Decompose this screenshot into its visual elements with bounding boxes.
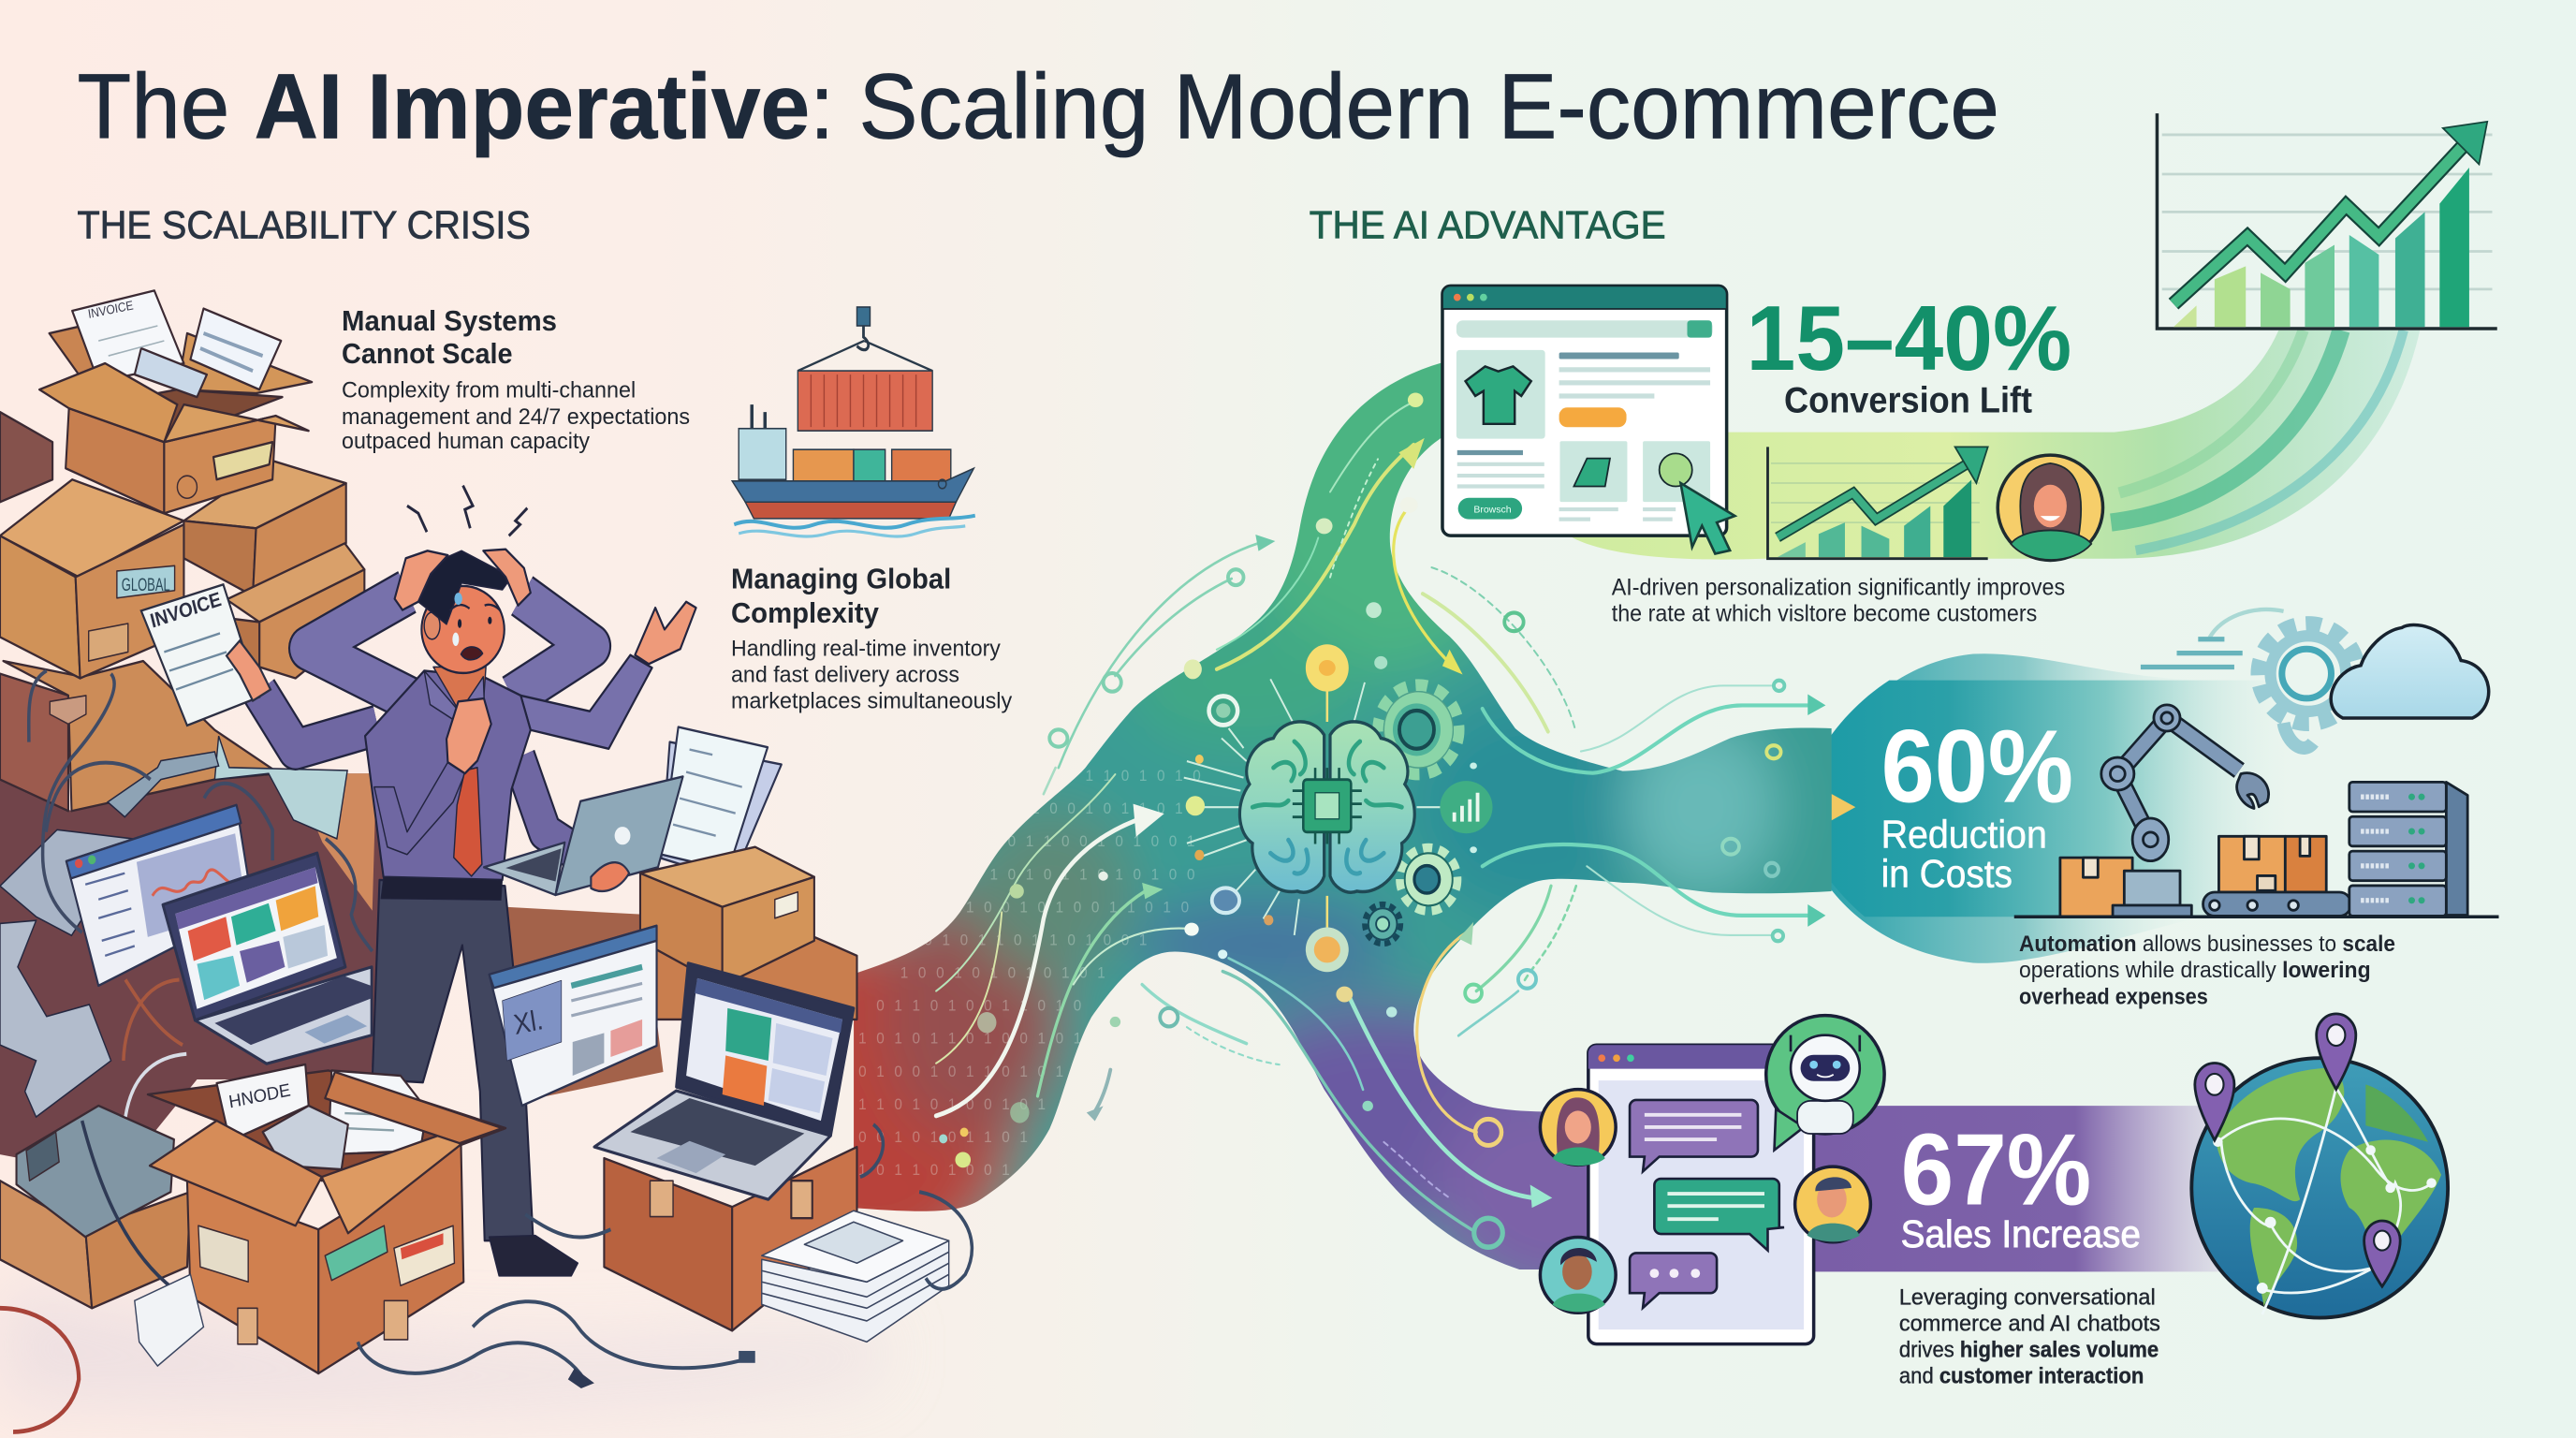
- text: automation description: Automation allows businesses to scale: [2019, 932, 2395, 957]
- stat: cost reduction: 60%: [1881, 709, 2073, 824]
- text: automation description: operations while drastically lowering: [2019, 959, 2371, 983]
- monitor: analytics dashboard: [66, 805, 253, 986]
- right box stack: [640, 847, 856, 1020]
- papers and handheld laptop: [484, 727, 782, 895]
- text block: managing global complexity: [731, 562, 1012, 713]
- text: conversion description: the rate at which visltore become customers: [1612, 601, 2037, 626]
- icon: chatbot: [1766, 1016, 1884, 1151]
- icon: gear, cloud and speed lines: [2141, 609, 2489, 748]
- browser window: shop: [1442, 286, 1727, 536]
- binary digits: 1 0 0 1 0 1 0 1 0 1 0 1: [900, 964, 1108, 982]
- floor cables and loose paper: [0, 1124, 972, 1431]
- floor shadow: [0, 1282, 886, 1409]
- text: sales description: [1899, 1285, 2160, 1389]
- binary digits: 1 1 0 1 0 1 0 0 1 0 1: [858, 1095, 1048, 1113]
- tie: [454, 768, 482, 876]
- open arm: [520, 655, 652, 749]
- text block: managing global complexity: Complexity: [731, 596, 879, 629]
- text block: managing global complexity: and fast delivery across: [731, 663, 959, 687]
- shipping illustration and left scene: [0, 290, 975, 1431]
- flow stream: multicolour silhouette: [854, 363, 1832, 1269]
- icon: container ship: [732, 307, 975, 536]
- chat window: [1588, 1045, 1814, 1344]
- avatar: man with suit: [1795, 1167, 1870, 1242]
- binary digits: 1 0 1 1 0 1 0 0 1: [858, 1161, 1013, 1179]
- text: sales description: drives higher sales volume: [1899, 1339, 2159, 1363]
- stat: conversion lift: Conversion Lift: [1784, 381, 2032, 421]
- flow stream: teal band to cost reduction: [1801, 653, 2291, 963]
- chat bubble: purple: [1630, 1100, 1758, 1171]
- icon: brain with chip: [1239, 722, 1414, 892]
- icon: cursor: [1680, 483, 1734, 553]
- stat: cost reduction: [1881, 709, 2073, 896]
- node circles by brain: [1186, 644, 1349, 972]
- paper stack: [762, 1211, 949, 1342]
- arm holding invoice: [259, 691, 377, 750]
- trousers: [373, 880, 534, 1240]
- text: automation description: overhead expenses: [2019, 985, 2208, 1009]
- circuit rays around brain: [1184, 679, 1443, 935]
- heading: the scalability crisis: THE SCALABILITY CRISIS: [77, 202, 531, 246]
- text block: managing global complexity: Handling real-time inventory: [731, 637, 1001, 661]
- text block: manual systems: Cannot Scale: [342, 337, 513, 370]
- text block: manual systems: [342, 304, 690, 454]
- stat: cost reduction: Reduction: [1881, 813, 2047, 857]
- title: The AI Imperative: Scaling Modern E-commerce: [77, 54, 1999, 157]
- text block: manual systems: outpaced human capacity: [342, 430, 590, 454]
- icon: bar chart node: [1440, 781, 1492, 833]
- monitor: product page: [490, 926, 657, 1106]
- stat: sales increase: Sales Increase: [1901, 1212, 2141, 1255]
- binary digits: [858, 767, 1204, 1179]
- stat: sales increase: 67%: [1901, 1112, 2091, 1226]
- forearm across chest: [374, 762, 465, 855]
- arrows entering the brain: [936, 404, 1835, 1231]
- binary digits: 0 1 0 1 1 0 1 1 0 1 0 0 1: [924, 932, 1150, 949]
- text block: manual systems: Complexity from multi-channel: [342, 379, 636, 404]
- text: conversion description: [1612, 575, 2065, 626]
- stressed businessman: [259, 550, 696, 1276]
- text block: managing global complexity: Managing Global: [731, 562, 951, 594]
- lower-left box and device: [0, 1106, 190, 1308]
- binary digits: 0 0 1 0 1 0 1 1 0 1: [858, 1128, 1031, 1146]
- binary digits: 0 1 0 1 0 1 1 0 1 0 1 0 0: [972, 866, 1198, 884]
- stat: sales increase: [1901, 1112, 2141, 1255]
- stat: cost reduction: in Costs: [1881, 852, 2012, 896]
- chat bubble: green: [1654, 1179, 1784, 1251]
- flow stream: purple band behind chat: [1808, 1106, 2219, 1271]
- open cardboard box: HNODE: [227, 1079, 292, 1112]
- invoice sheet in hand: [141, 584, 271, 726]
- arm holding laptop: [519, 757, 591, 862]
- text: sales description: Leveraging conversational: [1899, 1285, 2156, 1310]
- arrowheads: [1087, 438, 1855, 1208]
- icon: small gear: [1365, 904, 1400, 944]
- avatar: woman: [1540, 1090, 1616, 1166]
- text block: managing global complexity: marketplaces simultaneously: [731, 689, 1012, 713]
- torso: [365, 670, 531, 880]
- binary digits: 0 1 1 0 1 0 0 1 1 0 1 0: [876, 997, 1084, 1015]
- hands: [395, 550, 447, 610]
- automation scene: robot arm, boxes, conveyor and servers: [2014, 705, 2499, 917]
- monitor: product page: Xl.: [512, 1005, 545, 1041]
- browser window: shop: Browsch: [1473, 505, 1512, 516]
- map pins: [2195, 1014, 2400, 1286]
- plastic wrap and cables: [0, 670, 373, 1117]
- stat: conversion lift: 15–40%: [1747, 286, 2071, 389]
- text: conversion description: AI-driven personalization significantly improves: [1612, 575, 2065, 600]
- central data flow network: [854, 363, 1855, 1269]
- flow stream: top-right green band to chart: [1560, 330, 2420, 560]
- growth chart: small: [1767, 447, 1988, 559]
- heading: the AI advantage: THE AI ADVANTAGE: [1310, 202, 1666, 246]
- icon: medium gear: [1400, 848, 1457, 911]
- binary digits: 1 1 0 1 0 1 0: [1086, 767, 1204, 785]
- text block: manual systems: Manual Systems: [342, 304, 557, 337]
- neck and collar: [433, 667, 486, 712]
- raised arms: [309, 592, 420, 705]
- pile of cardboard boxes: INVOICE: [87, 298, 134, 321]
- pile of cardboard boxes: GLOBAL: [122, 575, 170, 594]
- binary digits: 0 1 0 0 1 0 1 1 0 1 0 1: [858, 1063, 1066, 1080]
- laptop: product tiles: [163, 853, 372, 1064]
- binary digits: 1 1 0 0 1 0 1 0 0 1 1 0 1 0: [948, 899, 1192, 917]
- avatar: man: [1540, 1238, 1616, 1313]
- pile of cardboard boxes: [0, 290, 664, 1177]
- text: automation description: [2019, 932, 2395, 1009]
- text: sales description: commerce and AI chatbots: [1899, 1313, 2160, 1337]
- chat bubble: typing: [1630, 1253, 1717, 1308]
- avatar: happy customer: [1998, 455, 2103, 560]
- laptop: storefront: [594, 963, 854, 1199]
- open cardboard box: [148, 1064, 505, 1373]
- top open box: [79, 389, 283, 442]
- binary digits: 1 0 1 1 0 0 1 0 1 0 0 1: [989, 833, 1198, 850]
- icon: globe with route pins: [2191, 1014, 2448, 1318]
- text: sales description: and customer interaction: [1899, 1365, 2144, 1389]
- growth chart: large: [2157, 113, 2497, 329]
- binary digits: 1 0 1 0 1 1 0 1 0 0 1 0 1: [858, 1030, 1084, 1048]
- invoice sheet in hand: INVOICE: [148, 589, 224, 633]
- icon: big gear: [1378, 685, 1459, 774]
- node rings and dots: [1049, 569, 1784, 1247]
- box under laptop: [604, 1147, 856, 1330]
- stress marks: [407, 486, 527, 536]
- binary digits: 0 1 0 0 1 0 1 1 0 1: [1014, 800, 1186, 817]
- text block: manual systems: management and 24/7 expectations: [342, 405, 690, 430]
- head: [421, 586, 505, 673]
